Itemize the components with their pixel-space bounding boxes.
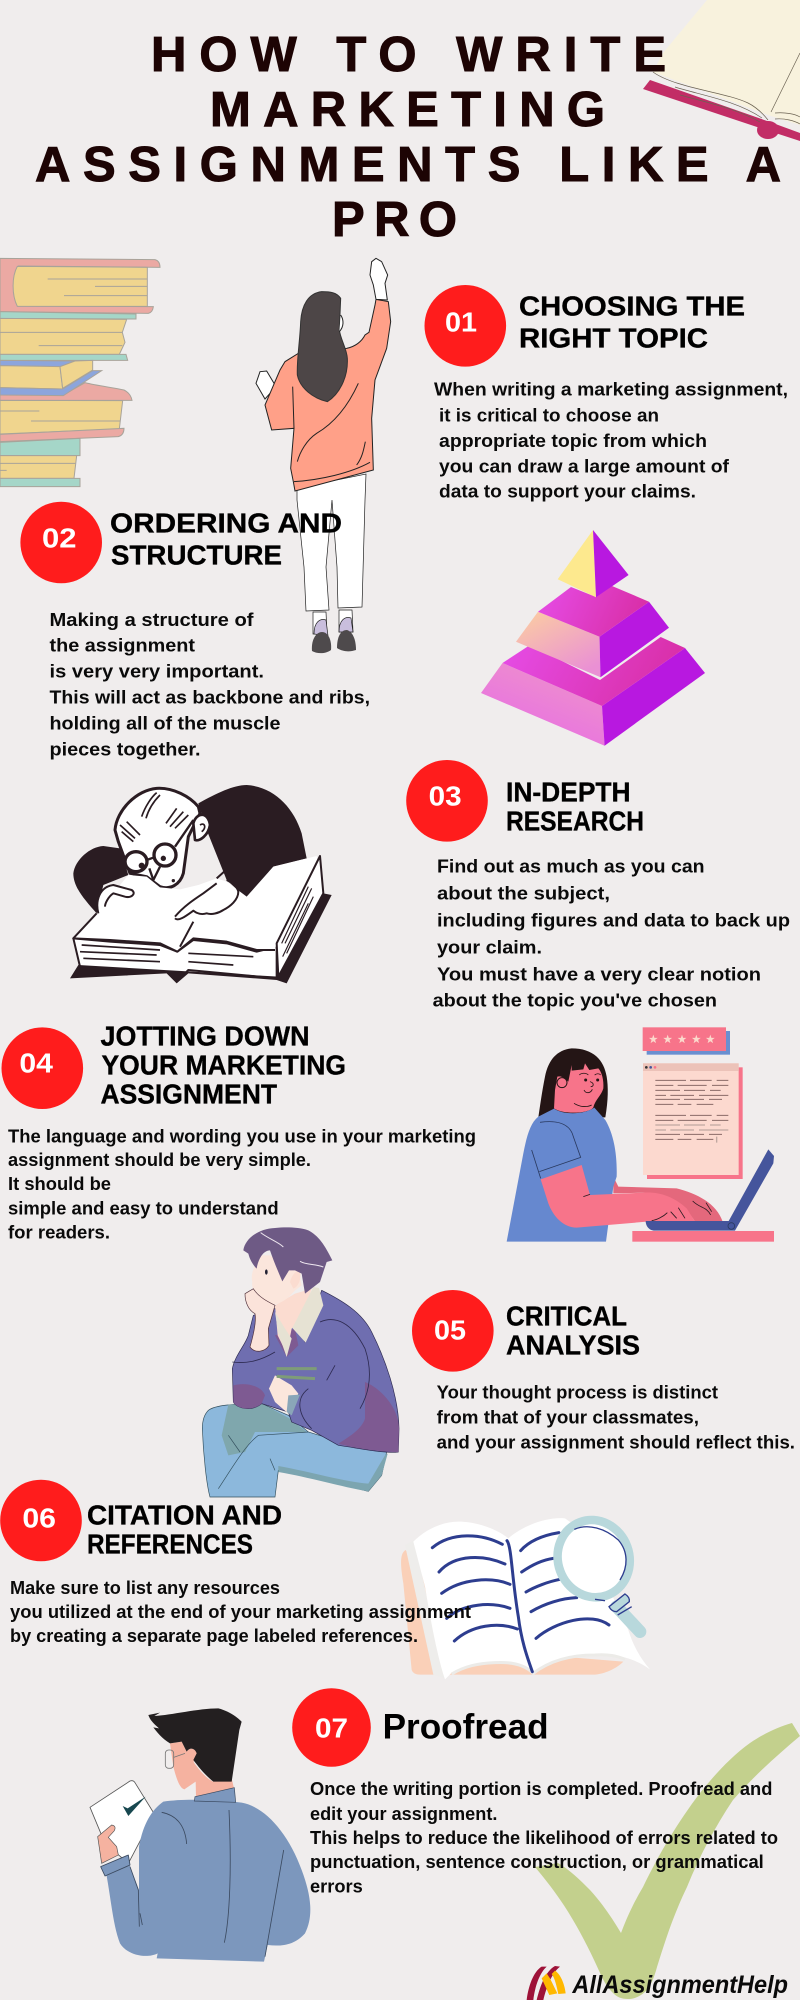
heading 04 — [100, 1020, 346, 1109]
text block 01: When writing a marketing assignment, — [434, 380, 788, 400]
heading 01: CHOOSING THE — [519, 290, 745, 321]
badge 05 — [412, 1290, 494, 1372]
badge 03 — [406, 760, 488, 842]
badge 02: 02 — [42, 523, 76, 554]
text block 06: Make sure to list any resources — [10, 1578, 280, 1598]
illustration: man holding a checklist — [90, 1708, 310, 1962]
logo: AllAssignmentHelp: AllAssignmentHelp — [571, 1971, 788, 1999]
heading 06: REFERENCES — [87, 1528, 253, 1559]
text block 03: You must have a very clear notion — [437, 965, 761, 985]
text block 05: and your assignment should reflect this. — [437, 1432, 795, 1452]
heading 01 — [519, 290, 745, 354]
badge 03: 03 — [429, 780, 462, 811]
badge 02 — [20, 502, 102, 583]
badge 06 — [0, 1480, 82, 1561]
text block 04: for readers. — [8, 1223, 110, 1243]
heading 03 — [506, 777, 644, 837]
illustration: thinking boy — [202, 1227, 399, 1497]
text block 06 — [10, 1578, 471, 1646]
text block 05: from that of your classmates, — [437, 1407, 699, 1427]
illustration: open book with magnifying glass — [401, 1510, 650, 1679]
text block 06: by creating a separate page labeled references. — [10, 1626, 418, 1646]
title: ASSIGNMENTS LIKE A — [35, 138, 781, 192]
illustration: pyramid — [481, 530, 705, 746]
illustration: old man reading a book — [70, 785, 332, 983]
text block 01: you can draw a large amount of — [439, 456, 730, 476]
text block 01: data to support your claims. — [439, 482, 696, 502]
heading 04: ASSIGNMENT — [100, 1078, 277, 1109]
heading 03: RESEARCH — [506, 806, 644, 837]
text block 04: The language and wording you use in your marketing — [8, 1126, 476, 1146]
heading 06: CITATION AND — [87, 1499, 282, 1530]
panel: step 04 jotting down your marketing assignment — [2, 1020, 476, 1243]
text block 05: Your thought process is distinct — [437, 1382, 718, 1402]
heading 02: STRUCTURE — [111, 539, 282, 570]
heading 03: IN-DEPTH — [506, 777, 631, 808]
badge 01 — [424, 285, 506, 367]
text block 02: is very very important. — [50, 662, 264, 682]
heading 02: ORDERING AND — [110, 507, 342, 538]
text block 02: Making a structure of — [50, 610, 255, 630]
text block 07: Once the writing portion is completed. Proofread and — [310, 1779, 772, 1799]
heading 04: YOUR MARKETING — [102, 1049, 346, 1080]
text block 07: This helps to reduce the likelihood of errors related to — [310, 1828, 778, 1848]
text block 02: the assignment — [50, 636, 195, 656]
heading 04: JOTTING DOWN — [100, 1020, 310, 1051]
panel: step 02 ordering and structure — [20, 502, 370, 760]
text block 03: Find out as much as you can — [437, 857, 705, 877]
text block 03: including figures and data to back up — [437, 911, 790, 931]
text block 06: you utilized at the end of your marketing assignment — [10, 1602, 471, 1622]
logo: AllAssignmentHelp — [527, 1966, 788, 2000]
illustration: open book top right — [643, 0, 800, 141]
heading 05: CRITICAL — [506, 1300, 627, 1331]
text block 03: your claim. — [437, 938, 542, 958]
text block 03 — [433, 857, 790, 1011]
badge 04: 04 — [19, 1047, 53, 1078]
badge 06: 06 — [22, 1502, 56, 1533]
heading 02 — [110, 507, 342, 570]
text block 04: assignment should be very simple. — [8, 1150, 311, 1170]
text block 02: This will act as backbone and ribs, — [50, 688, 370, 708]
heading 01: RIGHT TOPIC — [519, 323, 708, 354]
panel: step 07 proofread — [292, 1688, 778, 1896]
illustration: woman typing on a laptop — [507, 1027, 774, 1242]
illustration: stack of books — [0, 258, 160, 487]
text block 03: about the subject, — [437, 884, 610, 904]
text block 02: holding all of the muscle — [50, 714, 280, 734]
panel: step 05 critical analysis — [412, 1290, 795, 1452]
badge 05: 05 — [434, 1314, 466, 1345]
title: HOW TO WRITE — [151, 28, 666, 82]
text block 01: it is critical to choose an — [439, 405, 659, 425]
text block 03: about the topic you've chosen — [433, 991, 717, 1011]
text block 01 — [434, 380, 788, 502]
panel: step 01 choosing the right topic — [424, 285, 788, 502]
title: MARKETING — [210, 83, 605, 137]
heading 05: ANALYSIS — [506, 1329, 640, 1360]
text block 07: errors — [310, 1876, 363, 1896]
title — [35, 28, 781, 247]
badge 07: 07 — [315, 1712, 348, 1743]
heading 06 — [87, 1499, 282, 1559]
text block 07: punctuation, sentence construction, or grammatical — [310, 1852, 764, 1872]
illustration: big green check mark — [535, 1723, 800, 1999]
text block 01: appropriate topic from which — [439, 431, 707, 451]
text block 04 — [8, 1126, 476, 1243]
text block 05 — [437, 1382, 795, 1452]
text block 07 — [310, 1779, 778, 1896]
panel: step 06 citation and references — [0, 1480, 471, 1646]
heading 07: Proofread — [383, 1707, 549, 1746]
badge 04 — [2, 1027, 83, 1109]
title: PRO — [332, 193, 457, 247]
text block 02: pieces together. — [50, 740, 200, 760]
text block 04: simple and easy to understand — [8, 1199, 279, 1219]
text block 04: It should be — [8, 1174, 111, 1194]
panel: step 03 in-depth research — [406, 760, 790, 1011]
text block 02 — [50, 610, 370, 760]
text block 07: edit your assignment. — [310, 1804, 497, 1824]
illustration: girl reaching up — [256, 258, 391, 653]
heading 05 — [506, 1300, 640, 1360]
badge 01: 01 — [445, 307, 477, 338]
badge 07 — [292, 1688, 371, 1767]
